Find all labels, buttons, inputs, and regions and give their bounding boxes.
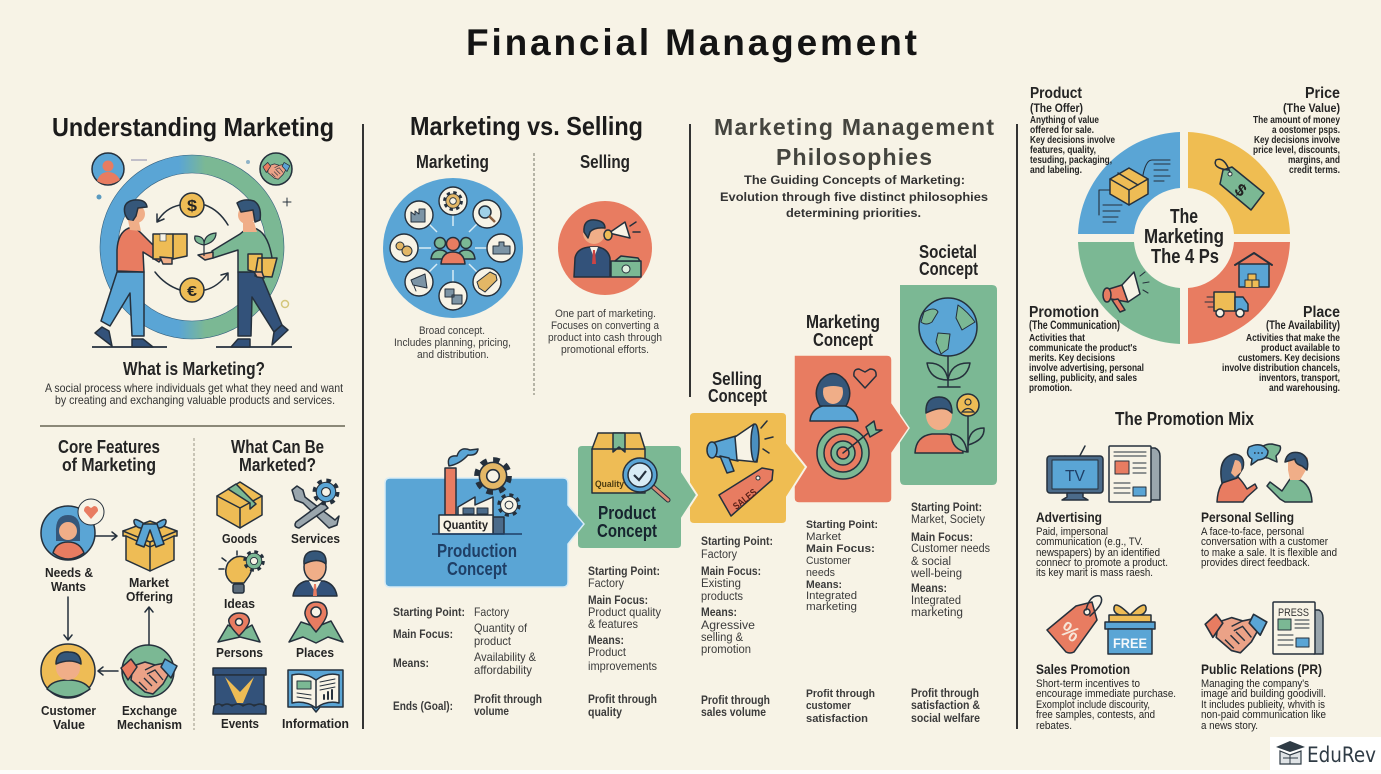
text: promotion: (The Communication) — [1029, 318, 1120, 332]
heading: marketing concept: Marketing — [806, 312, 880, 332]
text: price: price level, discounts, — [1253, 145, 1340, 156]
label: exchange mechanism — [117, 703, 182, 732]
text: selling caption: Focuses on converting a — [551, 320, 660, 332]
text: marketing details: Means: — [806, 579, 842, 591]
title: Financial Management — [466, 22, 917, 63]
text: philosophies intro: The Guiding Concepts of Marketing: — [744, 173, 965, 187]
text: what is marketing: What is Marketing? — [123, 359, 265, 379]
text: selling details: Existing — [701, 578, 741, 590]
label: production concept — [437, 541, 517, 579]
text: marketing details: Customer — [806, 555, 851, 567]
heading: marketing management philosophies: Marketing Management — [714, 114, 994, 140]
chart: 4 Ps donut — [1078, 132, 1290, 344]
text: product details: Profit through — [588, 692, 657, 706]
text: product: (The Offer) — [1030, 101, 1083, 115]
icon: globe plant — [915, 298, 984, 453]
icon: megaphone and sales tag: SALES — [731, 487, 760, 512]
text: price: The amount of money — [1253, 115, 1340, 126]
text: wheel centre: The — [1170, 206, 1198, 228]
text: sales promotion: free samples, contests, and — [1036, 709, 1155, 721]
heading: marketing management philosophies: Philosophies — [776, 144, 932, 170]
text: societal details: Main Focus: — [911, 532, 973, 544]
text: what is marketing: by creating and exchanging valuable products and services. — [55, 393, 335, 407]
text: societal details: Profit through — [911, 688, 979, 700]
icon: places map — [289, 602, 343, 643]
text: promotion: Activities that — [1029, 333, 1086, 344]
label: services: Services — [291, 531, 340, 546]
text: societal details: Market, Society — [911, 514, 985, 526]
icon: exchange mechanism — [121, 645, 177, 697]
text: advertising: its key marit is mass raesh. — [1036, 567, 1153, 579]
text: price: credit terms. — [1289, 165, 1340, 176]
text: production details: affordability — [474, 663, 532, 677]
label: goods: Goods — [222, 531, 257, 546]
text: production details: Availability & — [474, 650, 536, 664]
text: promotion: Promotion — [1029, 304, 1099, 321]
text: marketing details: customer — [806, 700, 852, 712]
arrow: exchange to value — [98, 667, 118, 675]
text: promotion: communicate the product's — [1029, 343, 1137, 354]
text: sales promotion — [1036, 661, 1176, 732]
icon: tv and newspaper: TV — [1065, 468, 1085, 485]
arrow: exchange to offering — [145, 607, 153, 647]
panel: marketing vs selling — [383, 111, 662, 361]
icon: woman heart target — [810, 369, 882, 479]
icon: needs and wants — [41, 499, 104, 560]
label: market offering: Market — [129, 575, 170, 590]
icon: percent tag and free gift — [1047, 596, 1155, 654]
text: promotion — [1029, 304, 1144, 394]
text: societal details: Integrated — [911, 595, 961, 607]
text: selling caption: promotional efforts. — [561, 344, 649, 356]
text: wheel centre — [1144, 206, 1224, 268]
icon: persons pin — [218, 613, 260, 642]
text: societal details — [910, 502, 990, 725]
text: price: a oostomer psps. — [1272, 125, 1340, 136]
panel: societal concept — [900, 242, 997, 485]
icon: factory: Quantity — [443, 518, 488, 532]
block: societal — [900, 285, 997, 485]
icon: services — [292, 481, 339, 528]
label: needs and wants: Wants — [51, 579, 86, 594]
label: product concept: Concept — [597, 521, 657, 541]
text: selling details: Profit through — [701, 695, 770, 707]
label: product concept: Product — [598, 503, 656, 523]
text: product details: & features — [588, 617, 638, 631]
icon: information book — [288, 670, 343, 712]
text: public relations: non-paid communication like — [1201, 709, 1326, 721]
text: societal details: marketing — [911, 607, 963, 619]
text: selling details: products — [701, 591, 743, 603]
heading: what can be marketed: What Can Be — [231, 437, 324, 457]
heading: selling concept: Concept — [708, 386, 767, 406]
label: places: Places — [296, 645, 334, 660]
text: price: (The Value) — [1283, 101, 1340, 115]
small badges — [92, 153, 124, 185]
icon: market offering gift — [123, 520, 177, 571]
text: personal selling: provides direct feedback. — [1201, 557, 1310, 569]
label: events: Events — [221, 716, 259, 731]
text: what is marketing: A social process where individuals get what they need and want — [45, 381, 344, 395]
heading: societal concept — [919, 242, 978, 279]
text: place: product available to — [1261, 343, 1340, 354]
text: societal details: satisfaction & — [911, 700, 980, 712]
text: place: and warehousing. — [1269, 383, 1340, 394]
text: philosophies intro — [720, 173, 988, 220]
text: place: inventors, transport, — [1259, 373, 1340, 384]
text: selling details: selling & — [701, 632, 743, 644]
text: advertising: connecr to promote a product. — [1036, 557, 1168, 569]
heading: core features: Core Features — [58, 437, 160, 457]
heading: selling concept: Selling — [712, 369, 762, 389]
icon: ideas — [219, 551, 263, 593]
text: sales promotion: Short-term incentives to — [1036, 678, 1140, 690]
bottom strip — [0, 770, 1381, 774]
text: philosophies intro: determining priorities. — [786, 206, 921, 220]
icon: handshake and press: PRESS — [1278, 607, 1309, 619]
text: price: Price — [1305, 85, 1340, 102]
text: selling details: Means: — [701, 607, 737, 619]
block: production with arrow — [385, 478, 584, 587]
panel: product concept — [577, 433, 697, 549]
text: production details: product — [474, 634, 512, 648]
text: societal details: Customer needs — [911, 543, 990, 555]
subheading: selling: Selling — [580, 152, 630, 172]
block: product with arrow — [577, 445, 697, 549]
heading: societal concept: Concept — [919, 259, 978, 279]
text: place: involve distribution chancels, — [1222, 363, 1340, 374]
label: production concept: Concept — [447, 559, 507, 579]
icon: warehouse and truck — [1205, 253, 1272, 317]
label: customer value: Customer — [41, 703, 96, 718]
text: public relations: image and building goodivill. — [1201, 688, 1326, 700]
panel: production concept — [385, 449, 584, 587]
panel: understanding marketing — [45, 112, 344, 407]
panel: selling concept — [689, 369, 806, 524]
text: selling caption: One part of marketing. — [555, 308, 656, 320]
text: place: Activities that make the — [1246, 333, 1340, 344]
text: product details: Starting Point: — [588, 564, 660, 578]
card: sales promotion — [1036, 596, 1176, 732]
text: product: Anything of value — [1030, 115, 1099, 126]
illustration: exchange ring with two people: $ — [187, 198, 197, 215]
text: advertising: Advertising — [1036, 509, 1102, 525]
text: product details: Means: — [588, 633, 624, 647]
heading: marketing concept: Concept — [813, 330, 873, 350]
label: needs and wants — [45, 565, 93, 594]
text: product details: quality — [588, 705, 622, 719]
text: marketing details: Starting Point: — [806, 519, 878, 531]
text: sales promotion: encourage immediate purchase. — [1036, 688, 1176, 700]
coins — [180, 193, 204, 217]
text: product details — [588, 564, 661, 719]
text: production details: volume — [474, 704, 509, 718]
text: product: features, quality, — [1030, 145, 1096, 156]
heading: marketing concept — [806, 312, 880, 350]
block: marketing with arrow — [794, 355, 909, 503]
icon: person in suit — [293, 551, 337, 596]
heading: core features: of Marketing — [62, 455, 156, 475]
text: product details: Main Focus: — [588, 593, 648, 607]
label: persons: Persons — [216, 645, 263, 660]
text: sales promotion: Sales Promotion — [1036, 661, 1130, 677]
text: public relations: It includes publieity, whvith is — [1201, 699, 1325, 711]
label: information: Information — [282, 716, 349, 731]
text: marketing details: needs — [806, 567, 835, 579]
text: price: Key decisions involve — [1254, 135, 1340, 146]
text: place: customers. Key decisions — [1238, 353, 1340, 364]
text: marketing details — [806, 519, 878, 725]
box — [153, 234, 187, 259]
label: product concept — [597, 503, 657, 541]
icon: goods — [217, 482, 262, 528]
text: selling details: promotion — [701, 644, 751, 656]
text: price: margins, and — [1288, 155, 1340, 166]
text: advertising: communication (e.g., TV. — [1036, 536, 1143, 548]
icon: two people talking — [1217, 444, 1312, 502]
heading: marketing management philosophies — [714, 114, 994, 170]
text: production details: Factory — [474, 605, 509, 619]
text: marketing details: Main Focus: — [806, 543, 875, 555]
card: advertising — [1036, 446, 1168, 579]
text: personal selling: conversation with a customer — [1201, 536, 1328, 548]
text: selling details — [701, 536, 773, 719]
text: wheel centre: The 4 Ps — [1151, 246, 1219, 268]
text: production details: Main Focus: — [393, 627, 453, 641]
heading: what can be marketed: Marketed? — [239, 455, 316, 475]
text: societal details: & social — [911, 556, 951, 568]
panel: core features of marketing — [41, 437, 182, 732]
icon: percent tag and free gift: FREE — [1113, 635, 1147, 651]
text: selling details: Main Focus: — [701, 566, 761, 578]
icon: price tag: $ — [1231, 180, 1250, 201]
plant — [195, 233, 216, 256]
card: public relations — [1201, 602, 1326, 732]
text: production details: Starting Point: — [393, 605, 465, 619]
panel: what can be marketed — [213, 437, 349, 731]
text: public relations: Managing the company's — [1201, 678, 1309, 690]
subheading: marketing: Marketing — [416, 152, 489, 172]
card: personal selling — [1201, 444, 1337, 569]
text: selling details: Factory — [701, 549, 737, 561]
block: selling with arrow — [689, 412, 806, 524]
diagram: marketing circle — [383, 178, 523, 318]
text: product: offered for sale. — [1030, 125, 1094, 136]
text: marketing details: Profit through — [806, 688, 875, 700]
text: product: Product — [1030, 85, 1083, 102]
text: production details: Ends (Goal): — [393, 699, 453, 713]
icon: percent tag and free gift: % — [1056, 617, 1084, 647]
text: societal details: well-being — [910, 568, 962, 580]
icon: product box — [1099, 160, 1170, 222]
text: sales promotion: rebates. — [1036, 720, 1072, 732]
icon: megaphone and sales tag — [707, 421, 773, 516]
text: public relations: Public Relations (PR) — [1201, 661, 1322, 677]
text: marketing details: marketing — [806, 601, 857, 613]
icon: promotion megaphone — [1103, 272, 1149, 312]
label: customer value: Value — [53, 717, 85, 732]
text: marketing caption: and distribution. — [417, 349, 489, 361]
text: marketing details: Market — [806, 531, 841, 543]
heading: the promotion mix: The Promotion Mix — [1115, 409, 1254, 429]
text: selling caption — [548, 308, 662, 356]
text: production details: Quantity of — [474, 621, 528, 635]
label: production concept: Production — [437, 541, 517, 561]
text: marketing details: satisfaction — [806, 713, 868, 725]
text: what is marketing — [45, 359, 344, 407]
left person — [101, 272, 144, 336]
text: production details: Means: — [393, 656, 429, 670]
text: promotion: promotion. — [1029, 383, 1072, 394]
panel: the 4 Ps wheel — [1078, 132, 1290, 344]
illustration: exchange ring with two people — [92, 153, 292, 347]
text: production details — [393, 605, 542, 718]
text: price — [1253, 85, 1340, 176]
label: ideas: Ideas — [224, 596, 255, 611]
text: product details: Product quality — [588, 605, 661, 619]
heading: core features — [58, 437, 160, 475]
panel: marketing concept — [794, 312, 909, 503]
icon: factory — [432, 449, 522, 534]
text: advertising: newspapers) by an identified — [1036, 547, 1160, 559]
text: personal selling: Personal Selling — [1201, 509, 1294, 525]
logo: EduRev badge — [1270, 737, 1381, 770]
text: product: and labeling. — [1030, 165, 1082, 176]
diagram: selling circle — [558, 201, 652, 295]
text: advertising: Paid, impersonal — [1036, 526, 1108, 538]
text: public relations — [1201, 661, 1326, 732]
icon: customer value — [41, 644, 95, 698]
text: place — [1222, 304, 1340, 394]
text: product details: Product — [588, 645, 627, 659]
heading: selling concept — [708, 369, 767, 406]
text: selling details: Starting Point: — [701, 536, 773, 548]
label: market offering: Offering — [126, 589, 173, 604]
label: needs and wants: Needs & — [45, 565, 93, 580]
text: advertising — [1036, 509, 1168, 579]
text: selling details: sales volume — [701, 707, 766, 719]
text: product: tesuding, packaging, — [1030, 155, 1112, 166]
text: societal details: Means: — [911, 583, 947, 595]
text: selling caption: product into cash through — [548, 332, 662, 344]
text: product details: improvements — [588, 659, 657, 673]
text: promotion: merits. Key decisions — [1029, 353, 1115, 364]
text: place: (The Availability) — [1266, 318, 1340, 332]
text: societal details: Starting Point: — [911, 502, 982, 514]
text: marketing caption — [394, 325, 511, 361]
text: promotion: involve advertising, personal — [1029, 363, 1144, 374]
arrow: needs to value — [64, 597, 72, 640]
label: exchange mechanism: Exchange — [122, 703, 177, 718]
text: personal selling — [1201, 509, 1337, 569]
text: product details: Factory — [588, 576, 624, 590]
text: sales promotion: Exomplot include discourity, — [1036, 699, 1150, 711]
text: marketing caption: Includes planning, pricing, — [394, 337, 511, 349]
illustration: exchange ring with two people: € — [187, 283, 198, 300]
text: production details: Profit through — [474, 692, 542, 706]
text: societal details: social welfare — [911, 713, 980, 725]
text: personal selling: to make a sale. It is flexible and — [1201, 547, 1337, 559]
text: philosophies intro: Evolution through five distinct philosophies — [720, 190, 988, 204]
icon: events stage — [213, 668, 266, 714]
text: product: Key decisions involve — [1030, 135, 1115, 146]
text: marketing caption: Broad concept. — [419, 325, 485, 337]
heading: what can be marketed — [231, 437, 324, 475]
label: customer value — [41, 703, 96, 732]
heading: marketing vs selling: Marketing vs. Selling — [410, 111, 643, 141]
text: selling details: Agressive — [701, 620, 755, 632]
icon: price tag — [1215, 159, 1264, 210]
panel: philosophies heading — [714, 114, 994, 220]
text: product — [1030, 85, 1115, 176]
text: marketing details: Integrated — [806, 590, 857, 602]
text: place: Place — [1303, 304, 1340, 321]
label: market offering — [126, 575, 173, 604]
label: exchange mechanism: Mechanism — [117, 717, 182, 732]
arrow: needs to offering — [95, 532, 117, 540]
text: public relations: a news story. — [1201, 720, 1258, 732]
heading: societal concept: Societal — [919, 242, 977, 262]
text: promotion: selling, publicity, and sales — [1029, 373, 1137, 384]
text: wheel centre: Marketing — [1144, 226, 1224, 248]
heading: understanding marketing: Understanding Marketing — [52, 112, 334, 142]
right person — [238, 272, 282, 336]
text: personal selling: A face-to-face, personal — [1201, 526, 1304, 538]
icon: box with magnifier: Quality — [595, 479, 625, 490]
